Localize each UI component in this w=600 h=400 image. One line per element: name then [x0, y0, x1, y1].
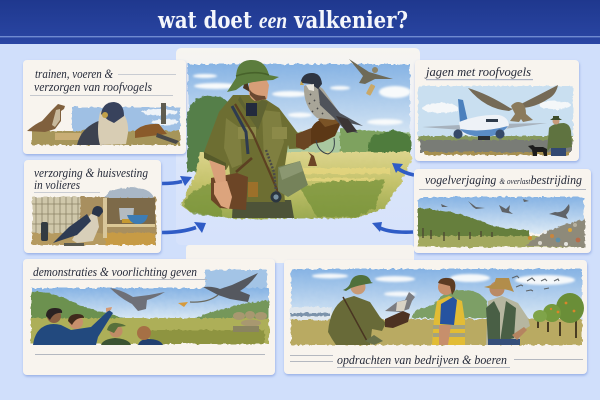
title: wat doet een valkenier?: [157, 7, 408, 34]
arrow: verzorging lower to centre: [162, 222, 206, 233]
heading: opdrachten van bedrijven & boeren: [337, 352, 507, 367]
heading: verzorging & huisvesting: [34, 165, 148, 180]
heading: trainen, voeren &: [35, 66, 114, 81]
raptor: [468, 85, 558, 122]
falcon on glove: [300, 73, 363, 133]
illustration: [290, 269, 582, 345]
orchard and rubble: [423, 223, 580, 246]
panel: trainen, voeren en verzorgen: [23, 60, 186, 154]
arrow: verzorging to centre: [162, 176, 192, 186]
arrow: overlast to centre: [372, 222, 413, 232]
orchard trees: [533, 293, 584, 338]
spectators: [33, 307, 163, 345]
farmer with hat: [484, 278, 530, 345]
illustration: [418, 86, 573, 155]
panel: jagen met roofvogels: [415, 60, 579, 161]
panel: central falconer: [176, 48, 420, 245]
heading: demonstraties & voorlichting geven: [33, 264, 197, 279]
man with dog: [528, 116, 572, 156]
birds flock: [441, 199, 570, 219]
illustration: [31, 270, 269, 344]
panel: verzorging en huisvesting: in volieres: [34, 177, 80, 192]
panel: opdrachten van bedrijven en boeren: [284, 260, 587, 374]
small falcon and lure: [349, 59, 393, 96]
man in safety vest: [432, 278, 465, 345]
illustration: [418, 197, 585, 247]
header banner: [0, 0, 600, 44]
rocks: [233, 311, 267, 332]
illustration: [32, 107, 180, 145]
panel: demonstraties en voorlichting: [23, 259, 275, 375]
falconer with hawk: [328, 275, 415, 345]
panel: verzorging en huisvesting: [24, 160, 161, 253]
falconer figure: [204, 60, 340, 218]
heading: vogelverjaging & overlastbestrijding: [425, 172, 582, 187]
distant birds: [512, 276, 559, 291]
arrow: vogelverjaging to centre: [392, 163, 414, 175]
illustration: [32, 187, 156, 245]
heading: jagen met roofvogels: [424, 64, 531, 79]
panel: vogelverjaging en overlastbestrijding: [414, 169, 591, 253]
scene background: [181, 64, 412, 219]
soaring falcons and lure: [110, 273, 258, 311]
panel strip below central scene: [186, 245, 414, 263]
panel: trainen, voeren en verzorgen: verzorgen van roofvogels: [34, 79, 152, 94]
airplane: [422, 99, 547, 140]
